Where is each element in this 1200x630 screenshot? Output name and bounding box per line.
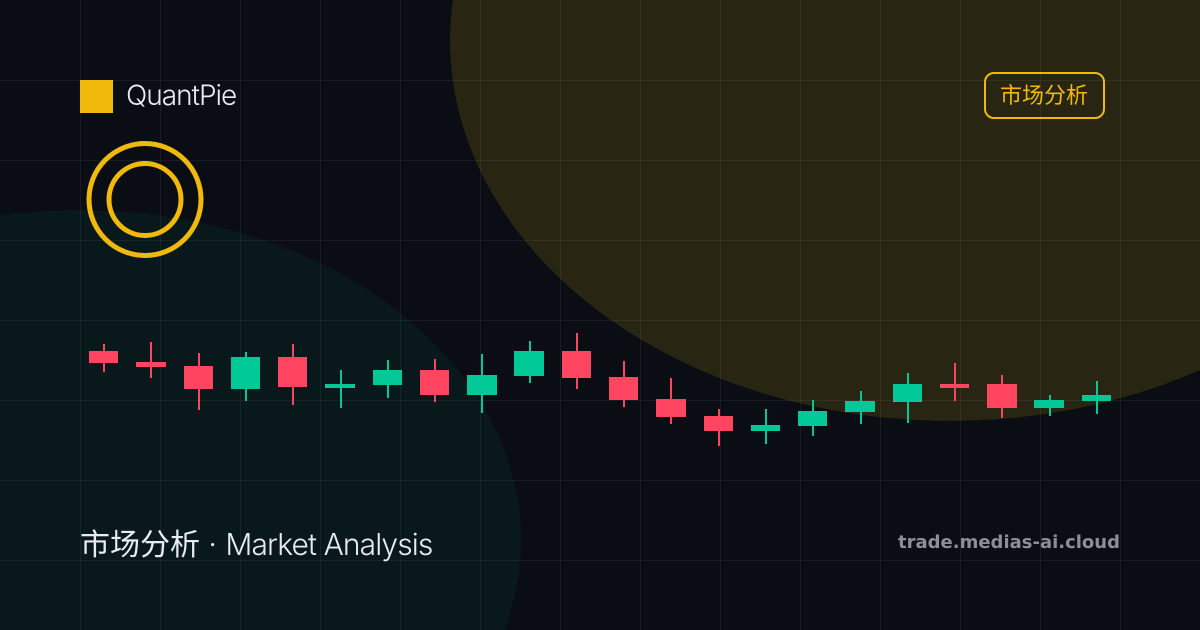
site url: trade.medias-ai.cloud (898, 532, 1120, 553)
icon: concentric rings (89, 144, 201, 256)
badge label: 市场分析 (1000, 83, 1088, 108)
logo mark (80, 80, 113, 113)
background blob: gold (450, 0, 1200, 421)
title: 市场分析 · Market Analysis (80, 527, 432, 563)
badge: market analysis (984, 72, 1105, 119)
brand name: QuantPie (126, 78, 236, 112)
background blob: teal (0, 210, 521, 630)
candlestick chart (89, 333, 1111, 446)
